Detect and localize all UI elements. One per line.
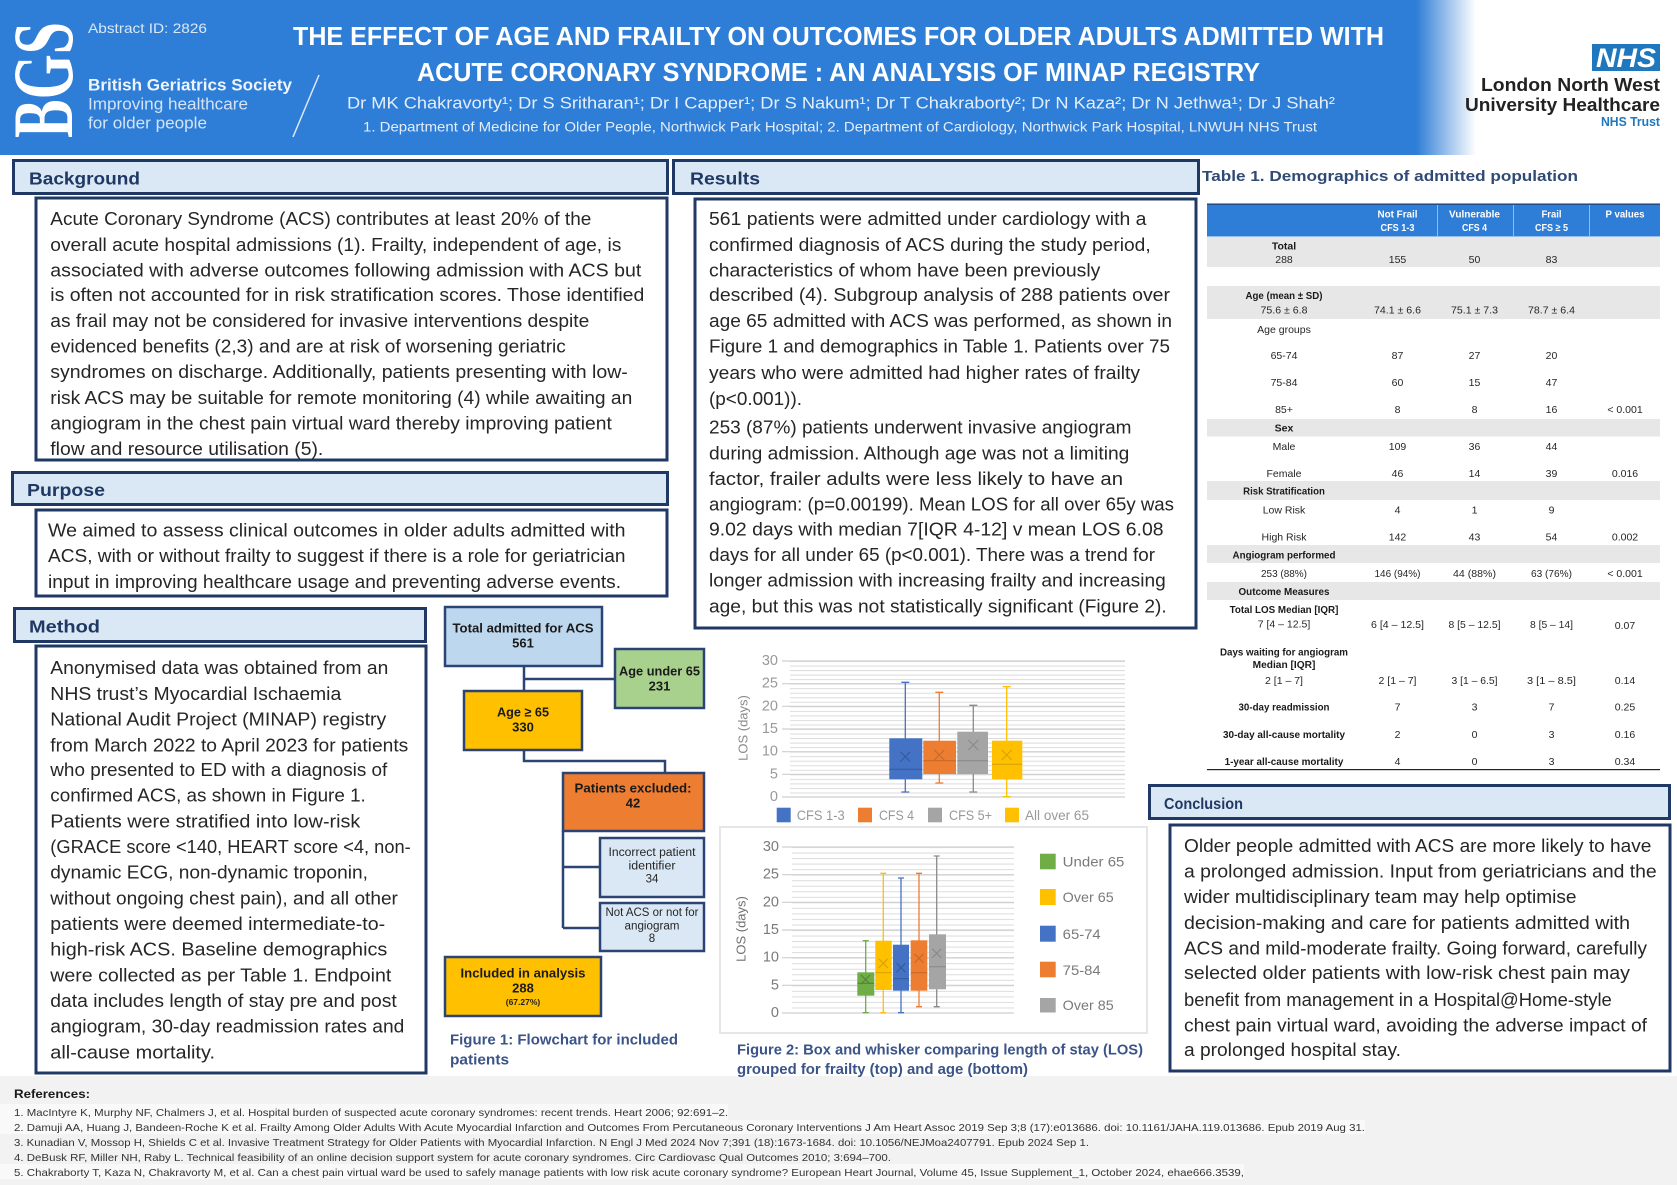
box: 75-84 xyxy=(911,873,927,1007)
legend: frailty: CFS 1-3 xyxy=(797,807,845,823)
table body rows: Age (mean ± SD) xyxy=(1246,290,1322,302)
text: method: Patients were stratified into low-risk xyxy=(50,811,361,831)
panel: method xyxy=(14,608,426,1073)
text: background: angiogram in the chest pain virtual ward thereby improving patient xyxy=(50,414,612,434)
table body rows: 0.25 xyxy=(1615,702,1635,714)
table body rows: Angiogram performed xyxy=(1232,550,1336,562)
y axis labels: 15 xyxy=(763,922,779,938)
node: incorrect identifier: Incorrect patient xyxy=(608,847,696,859)
node: incorrect identifier: 34 xyxy=(646,874,659,886)
text: conclusion: benefit from management in a Hospital@Home-style xyxy=(1184,990,1612,1010)
table body rows: 4 xyxy=(1395,504,1401,516)
text: results: longer admission with increasing frailty and increasing xyxy=(709,571,1166,591)
text: conclusion: chest pain virtual ward, avoiding the adverse impact of xyxy=(1184,1016,1648,1036)
table header row: Vulnerable xyxy=(1449,208,1500,220)
table body rows: 14 xyxy=(1469,468,1480,480)
table body rows: 16 xyxy=(1546,404,1557,416)
panel: background xyxy=(14,160,668,460)
node: not ACS: angiogram xyxy=(624,920,680,932)
legend: age xyxy=(1040,854,1125,1013)
legend: age: Over 65 xyxy=(1063,889,1114,905)
table body rows: 63 (76%) xyxy=(1531,568,1572,580)
table body rows: 3 [1 – 8.5] xyxy=(1527,675,1576,687)
table body rows: 8 [5 – 14] xyxy=(1530,619,1573,631)
node: included in analysis xyxy=(445,957,601,1016)
table body rows: 0.016 xyxy=(1612,468,1638,480)
text: conclusion: Older people admitted with ACS are more likely to have xyxy=(1184,836,1651,856)
table body rows: 85+ xyxy=(1275,404,1293,416)
node: incorrect identifier: identifier xyxy=(628,860,676,872)
table body rows: Total xyxy=(1272,240,1296,252)
chart: box plot by frailty xyxy=(736,653,1125,823)
table body rows: 0 xyxy=(1472,729,1478,741)
text: conclusion xyxy=(1183,836,1657,1060)
text: results: factor, frailer adults were less likely to have an xyxy=(709,469,1123,489)
table body rows: 2 [1 – 7] xyxy=(1265,675,1303,687)
text: results: angiogram: (p=0.00199). Mean LOS for all over 65y was xyxy=(709,495,1174,515)
figure 2 caption: Figure 2: Box and whisker comparing length of stay (LOS) xyxy=(737,1042,1143,1058)
table body rows: 4 xyxy=(1395,756,1401,768)
table header row: Frail xyxy=(1542,208,1562,220)
title xyxy=(293,21,1384,87)
references: 4. DeBusk RF, Miller NH, Raby L. Technical feasibility of an online decision support system for acute coronary syndromes. Circ Cardiovasc Qual Outcomes 2010; 3:694–700. xyxy=(14,1152,891,1164)
y axis labels: 0 xyxy=(770,789,778,805)
y axis labels xyxy=(763,839,779,1021)
panel: purpose xyxy=(12,472,668,596)
table body rows: 27 xyxy=(1469,350,1480,362)
text: method: all-cause mortality. xyxy=(50,1042,215,1062)
table body rows: 36 xyxy=(1469,441,1480,453)
box: CFS 1-3 xyxy=(889,682,922,792)
text: method: high-risk ACS. Baseline demographics xyxy=(50,940,387,960)
text: method: dynamic ECG, non-dynamic troponin, xyxy=(50,863,368,883)
node: included in analysis: 288 xyxy=(512,980,534,996)
text: conclusion: selected older patients with low-risk chest pain may xyxy=(1184,963,1630,983)
table body rows: 75.1 ± 7.3 xyxy=(1451,304,1498,316)
society name: for older people xyxy=(88,114,207,132)
node: not ACS xyxy=(600,903,704,951)
table body rows: 54 xyxy=(1546,531,1557,543)
node: total admitted: 561 xyxy=(512,636,534,650)
table header row: CFS ≥ 5 xyxy=(1535,222,1568,234)
text: background: flow and resource utilisation (5). xyxy=(50,439,323,459)
table body rows: 2 [1 – 7] xyxy=(1379,675,1417,687)
table body rows: 1 xyxy=(1472,504,1478,516)
references: 5. Chakraborty T, Kaza N, Chakravorty M, et al. Can a chest pain virtual ward be used to safely manage patients with low risk acute coronary syndrome? European Heart Journal, Volume 45, Issue Supplement_1, October 2024, ehae666.3539, xyxy=(14,1167,1244,1179)
node: total admitted xyxy=(445,607,602,666)
heading: background: Background xyxy=(29,168,140,188)
text: background: risk ACS may be suitable for remote monitoring (4) while awaiting an xyxy=(50,388,632,408)
text: results: 9.02 days with median 7[IQR 4-12] v mean LOS 6.08 xyxy=(709,519,1164,539)
table body rows: 288 xyxy=(1275,254,1293,266)
table body rows: 146 (94%) xyxy=(1374,568,1420,580)
header banner xyxy=(0,0,1661,155)
society name xyxy=(88,76,293,132)
logo: NHS trust: University Healthcare xyxy=(1465,95,1660,115)
text: background xyxy=(50,209,644,459)
legend: age: Over 85 xyxy=(1063,997,1114,1013)
legend: age: 65-74 xyxy=(1063,926,1101,942)
title: ACUTE CORONARY SYNDROME : AN ANALYSIS OF MINAP REGISTRY xyxy=(417,57,1260,87)
box: CFS 5+ xyxy=(957,705,988,792)
table body rows: 2 xyxy=(1395,729,1401,741)
node: patients excluded xyxy=(563,773,704,831)
text: results: characteristics of whom have been previously xyxy=(709,260,1100,280)
text: results: days for all under 65 (p<0.001). There was a trend for xyxy=(709,545,1155,565)
legend: age: 75-84 xyxy=(1063,962,1101,978)
table body rows: 8 [5 – 12.5] xyxy=(1448,619,1501,631)
table body rows: 0.14 xyxy=(1615,675,1635,687)
table body rows: 15 xyxy=(1469,377,1480,389)
text: results: described (4). Subgroup analysis of 288 patients over xyxy=(709,285,1170,305)
table body rows: 0.16 xyxy=(1615,729,1635,741)
node: age 65 plus: Age ≥ 65 xyxy=(497,704,549,720)
node: age under 65: Age under 65 xyxy=(619,664,700,678)
table body rows xyxy=(1220,240,1643,768)
table body rows: Age groups xyxy=(1257,324,1311,336)
legend: frailty: All over 65 xyxy=(1025,807,1089,823)
node: patients excluded: 42 xyxy=(626,796,640,810)
table body rows: 0.002 xyxy=(1612,531,1638,543)
table body rows: Total LOS Median [IQR] xyxy=(1230,604,1338,616)
text: background: Acute Coronary Syndrome (ACS) contributes at least 20% of the xyxy=(50,209,591,229)
references: 1. MacIntyre K, Murphy NF, Chalmers J, et al. Hospital burden of suspected acute coronary syndromes: recent trends. Heart 2006; 92:691–2. xyxy=(14,1107,728,1119)
text: method: angiogram, 30-day readmission rates and xyxy=(50,1017,404,1037)
legend: frailty xyxy=(777,807,1089,823)
node: included in analysis: Included in analysis xyxy=(460,966,586,980)
table: demographics xyxy=(1207,204,1660,770)
text: results: during admission. Although age was not a limiting xyxy=(709,443,1129,463)
table body rows: 0.34 xyxy=(1615,756,1635,768)
text: purpose: We aimed to assess clinical outcomes in older adults admitted with xyxy=(48,520,626,540)
table body rows: 75-84 xyxy=(1271,377,1298,389)
table body rows: Risk Stratification xyxy=(1243,486,1325,498)
table header row xyxy=(1378,208,1645,234)
table body rows: 20 xyxy=(1546,350,1557,362)
table body rows: 46 xyxy=(1392,468,1403,480)
table body rows: Sex xyxy=(1275,422,1293,434)
chart: box plot by age xyxy=(720,827,1147,1033)
table body rows: 30-day all-cause mortality xyxy=(1223,729,1345,741)
table body rows: Outcome Measures xyxy=(1238,586,1330,598)
text: results: 561 patients were admitted under cardiology with a xyxy=(709,209,1147,229)
text: background: overall acute hospital admissions (1). Frailty, independent of age, is xyxy=(50,235,621,255)
society name: Improving healthcare xyxy=(88,94,248,114)
logo: NHS trust: London North West xyxy=(1481,75,1660,95)
box: over 85 xyxy=(929,856,946,1007)
heading: method: Method xyxy=(29,616,100,636)
table body rows: 253 (88%) xyxy=(1261,568,1307,580)
table body rows: 43 xyxy=(1469,531,1480,543)
logo: NHS trust: NHS xyxy=(1596,43,1656,73)
text: results: (p<0.001)). xyxy=(709,389,802,409)
table body rows: < 0.001 xyxy=(1607,404,1643,416)
text: purpose: input in improving healthcare usage and preventing adverse events. xyxy=(48,572,621,592)
table body rows: 74.1 ± 6.6 xyxy=(1374,304,1421,316)
y axis labels: 30 xyxy=(763,839,779,855)
box: all over 65 xyxy=(992,687,1022,797)
node: incorrect identifier xyxy=(600,838,704,897)
y axis labels: 10 xyxy=(762,744,778,760)
node: age under 65: 231 xyxy=(649,678,670,694)
text: conclusion: wider multidisciplinary team may help optimise xyxy=(1183,887,1576,907)
table header row: P values xyxy=(1606,208,1645,220)
table header row: CFS 1-3 xyxy=(1380,222,1415,234)
text: method: Anonymised data was obtained from an xyxy=(50,658,388,678)
y axis labels: 15 xyxy=(762,721,778,737)
references: 3. Kunadian V, Mossop H, Shields C et al. Invasive Treatment Strategy for Older Patients with Myocardial Infarction. N Engl J Med 2024 Nov 7;391 (18):1673-1684. doi: 10.1056/NEJMoa2407791. Epub 2024 Sep 1. xyxy=(14,1137,1089,1149)
text: results: years who were admitted had higher rates of frailty xyxy=(709,363,1140,383)
heading: results: Results xyxy=(690,168,760,188)
table body rows: 50 xyxy=(1469,254,1480,266)
y axis labels: 25 xyxy=(762,676,778,692)
text: method: patients were deemed intermediate-to- xyxy=(50,914,385,934)
text: background: as frail may not be considered for invasive interventions despite xyxy=(50,311,589,331)
node: total admitted: Total admitted for ACS xyxy=(452,620,594,636)
text: conclusion: decision-making and care for patients admitted with xyxy=(1184,913,1630,933)
abstract id: Abstract ID: 2826 xyxy=(88,20,207,36)
box: under 65 xyxy=(857,941,874,1013)
y axis title: LOS (days) xyxy=(736,695,750,761)
references: References: xyxy=(14,1089,90,1101)
table body rows: 8 xyxy=(1472,404,1478,416)
node: age under 65 xyxy=(615,649,704,708)
table body rows: Male xyxy=(1273,441,1296,453)
table body rows: 7 [4 – 12.5] xyxy=(1258,618,1310,630)
table body rows: 30-day readmission xyxy=(1238,702,1330,714)
table body rows: Female xyxy=(1266,468,1302,480)
text: method: without ongoing chest pain), and all other xyxy=(49,888,398,908)
figure 1 caption: Figure 1: Flowchart for included xyxy=(450,1032,678,1048)
table body rows: 44 xyxy=(1546,441,1557,453)
legend: frailty: CFS 5+ xyxy=(949,807,992,823)
table body rows: 0.07 xyxy=(1615,620,1635,632)
node: age 65 plus: 330 xyxy=(512,720,534,734)
text: background: syndromes on discharge. Additionally, patients presenting with low- xyxy=(50,362,628,382)
y axis labels: 0 xyxy=(771,1005,779,1021)
table body rows: 3 xyxy=(1549,756,1555,768)
text: method: from March 2022 to April 2023 for patients xyxy=(50,735,408,755)
text: results: confirmed diagnosis of ACS during the study period, xyxy=(709,235,1151,255)
table body rows: 3 xyxy=(1549,729,1555,741)
y axis labels: 25 xyxy=(763,867,779,883)
text: method xyxy=(49,658,411,1062)
footer background xyxy=(0,1076,1677,1185)
text: method: NHS trust’s Myocardial Ischaemia xyxy=(50,684,342,704)
legend: age: Under 65 xyxy=(1063,854,1125,870)
text: background: evidenced benefits (2,3) and are at risk of worsening geriatric xyxy=(50,336,566,356)
references xyxy=(0,1089,1365,1179)
text: purpose xyxy=(48,520,626,592)
table header row: Not Frail xyxy=(1378,208,1418,220)
authors: Dr MK Chakravorty¹; Dr S Sritharan¹; Dr I Capper¹; Dr S Nakum¹; Dr T Chakraborty²; Dr N Kaza²; Dr N Jethwa¹; Dr J Shah² xyxy=(347,94,1335,112)
table body rows: 87 xyxy=(1392,350,1403,362)
table body rows: 6 [4 – 12.5] xyxy=(1371,619,1424,631)
text: conclusion: ACS and mild-moderate frailty. Going forward, carefully xyxy=(1184,939,1647,959)
text: method: (GRACE score <140, HEART score <4, non- xyxy=(50,837,411,857)
panel: results xyxy=(674,160,1198,628)
figure 1 caption: patients xyxy=(450,1052,509,1068)
text: method: were collected as per Table 1. Endpoint xyxy=(49,965,391,985)
table body rows: Low Risk xyxy=(1263,504,1306,516)
node: not ACS: 8 xyxy=(649,933,655,945)
text: results: age 65 admitted with ACS was performed, as shown in xyxy=(709,311,1172,331)
table body rows: 109 xyxy=(1389,441,1406,453)
table body rows: 78.7 ± 6.4 xyxy=(1528,304,1575,316)
table body rows: 155 xyxy=(1389,254,1406,266)
text: purpose: ACS, with or without frailty to suggest if there is a role for geriatrician xyxy=(48,546,626,566)
text: method: confirmed ACS, as shown in Figure 1. xyxy=(50,786,366,806)
node: patients excluded: Patients excluded: xyxy=(574,780,692,796)
table body rows: 47 xyxy=(1546,377,1557,389)
table body rows: 9 xyxy=(1549,504,1555,516)
logo: NHS trust: NHS Trust xyxy=(1601,115,1661,129)
box: 65-74 xyxy=(893,878,909,1013)
heading: purpose: Purpose xyxy=(27,480,105,500)
table body rows: Days waiting for angiogram xyxy=(1220,647,1348,659)
table header row: CFS 4 xyxy=(1462,222,1487,234)
text: results: age, but this was not statistically significant (Figure 2). xyxy=(709,596,1167,616)
table body rows: 44 (88%) xyxy=(1453,568,1496,580)
text: results: Figure 1 and demographics in Table 1. Patients over 75 xyxy=(709,336,1170,356)
box: over 65 xyxy=(875,873,892,1013)
node: included in analysis: (67.27%) xyxy=(506,997,540,1007)
text: conclusion: a prolonged admission. Input from geriatricians and the xyxy=(1184,862,1657,882)
y axis labels: 30 xyxy=(762,653,778,669)
y axis labels: 10 xyxy=(763,950,779,966)
table body rows: 1-year all-cause mortality xyxy=(1225,756,1344,768)
heading: conclusion: Conclusion xyxy=(1164,796,1243,813)
text: results xyxy=(709,209,1174,616)
flowchart: included patients xyxy=(445,607,704,1016)
table body rows: 8 xyxy=(1395,404,1401,416)
y axis labels xyxy=(762,653,778,805)
y axis labels: 20 xyxy=(762,698,778,714)
table body rows: 3 xyxy=(1472,702,1478,714)
table body rows: 7 xyxy=(1395,702,1401,714)
y axis labels: 20 xyxy=(763,894,779,910)
text: results: 253 (87%) patients underwent invasive angiogram xyxy=(709,418,1132,438)
table body rows: 142 xyxy=(1389,531,1406,543)
box: CFS 4 xyxy=(923,692,956,783)
title: THE EFFECT OF AGE AND FRAILTY ON OUTCOMES FOR OLDER ADULTS ADMITTED WITH xyxy=(293,21,1384,51)
society name: British Geriatrics Society xyxy=(88,76,293,94)
y axis labels: 5 xyxy=(770,766,778,782)
table title: Table 1. Demographics of admitted population xyxy=(1202,168,1578,185)
legend: frailty: CFS 4 xyxy=(879,807,914,823)
references: 2. Damuji AA, Huang J, Bandeen-Roche K et al. Frailty Among Older Adults With Acute Myocardial Infarction and Outcomes From Percutaneous Coronary Interventions J Am Heart Assoc 2019 Sep 3;8 (17):e013686. doi: 10.1161/JAHA.119.013686. Epub 2019 Aug 31. xyxy=(14,1122,1365,1134)
table body rows: 0 xyxy=(1472,756,1478,768)
panel: conclusion xyxy=(1150,786,1670,1071)
table body rows: Median [IQR] xyxy=(1253,659,1315,671)
table body rows: 83 xyxy=(1546,254,1557,266)
figure 2 caption xyxy=(737,1042,1143,1078)
affiliations: 1. Department of Medicine for Older People, Northwick Park Hospital; 2. Department of Cardiology, Northwick Park Hospital, LNWUH NHS Trust xyxy=(363,118,1317,134)
table body rows: 3 [1 – 6.5] xyxy=(1452,675,1498,687)
table body rows: < 0.001 xyxy=(1607,568,1643,580)
table body rows: 60 xyxy=(1392,377,1403,389)
figure 1 caption xyxy=(450,1032,678,1068)
text: method: data includes length of stay pre and post xyxy=(50,991,397,1011)
y axis labels: 5 xyxy=(771,977,779,993)
logo: NHS trust xyxy=(1465,43,1661,129)
table body rows: 65-74 xyxy=(1271,350,1298,362)
y axis title: LOS (days) xyxy=(734,896,748,962)
table body rows: 75.6 ± 6.8 xyxy=(1260,304,1308,316)
text: background: associated with adverse outcomes following admission with ACS but xyxy=(50,260,641,280)
table body rows: 7 xyxy=(1549,702,1555,714)
table body rows: 39 xyxy=(1546,468,1557,480)
text: background: is often not accounted for in risk stratification scores. Those identified xyxy=(50,285,644,305)
table body rows: High Risk xyxy=(1262,531,1307,543)
figure 2 caption: grouped for frailty (top) and age (bottom) xyxy=(737,1062,1028,1078)
text: method: who presented to ED with a diagnosis of xyxy=(49,760,388,780)
node: not ACS: Not ACS or not for xyxy=(606,907,699,919)
text: method: National Audit Project (MINAP) registry xyxy=(50,710,386,730)
text: conclusion: a prolonged hospital stay. xyxy=(1184,1040,1401,1060)
node: age 65 plus xyxy=(464,691,582,750)
